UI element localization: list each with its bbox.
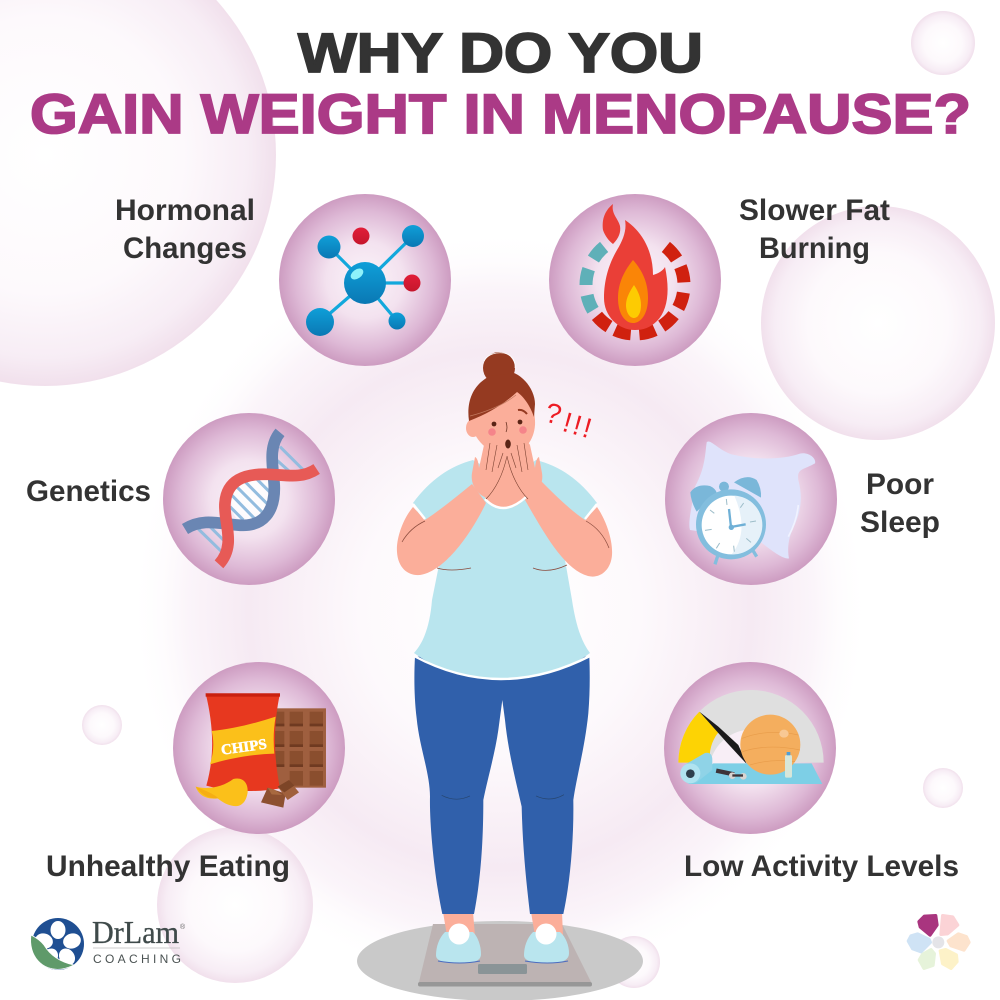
icon: six petal flower bbox=[908, 916, 969, 968]
arm creases bbox=[402, 521, 609, 570]
logo emblem bbox=[31, 918, 84, 970]
label: hormonal changes: Hormonal bbox=[115, 194, 255, 227]
right arm bbox=[525, 480, 612, 577]
surprise marks bbox=[542, 397, 598, 445]
t-shirt hem bbox=[414, 656, 590, 679]
label: slower fat burning: Burning bbox=[759, 232, 870, 265]
label: genetics: Genetics bbox=[26, 475, 151, 508]
logo wordmark: DrLam bbox=[92, 914, 179, 950]
sleeve trim bbox=[413, 504, 597, 519]
woman on scale bbox=[357, 352, 643, 1000]
label: unhealthy eating: Unhealthy Eating bbox=[46, 850, 290, 883]
label: poor sleep bbox=[860, 468, 940, 539]
title: GAIN WEIGHT IN MENOPAUSE? bbox=[30, 82, 971, 145]
label: hormonal changes bbox=[115, 194, 255, 265]
label: hormonal changes: Changes bbox=[123, 232, 247, 265]
floor shadow bbox=[357, 921, 643, 1000]
icon: low activity gauge and fitness gear bbox=[664, 662, 836, 834]
surprise marks: !!! bbox=[559, 406, 598, 445]
legs and shoes bbox=[436, 912, 569, 963]
label: poor sleep: Sleep bbox=[860, 506, 940, 539]
icon: molecule bbox=[279, 194, 451, 366]
icon: DNA helix bbox=[163, 413, 335, 585]
hands bbox=[472, 438, 542, 499]
icon: pillow and alarm clock bbox=[665, 413, 837, 585]
blue t-shirt bbox=[413, 460, 597, 679]
registered mark: ® bbox=[180, 923, 186, 931]
title bbox=[30, 21, 971, 145]
blue trousers bbox=[414, 657, 590, 914]
logo tagline: COACHING bbox=[93, 952, 181, 966]
icon: flame with burn ring bbox=[549, 194, 721, 366]
left arm bbox=[397, 484, 486, 575]
label: low activity levels: Low Activity Levels bbox=[684, 850, 959, 883]
neck and collar bbox=[485, 450, 526, 509]
logo: DrLam Coaching bbox=[31, 914, 186, 970]
head bbox=[466, 352, 535, 456]
label: poor sleep: Poor bbox=[866, 468, 934, 501]
icon: chips bag and chocolate: CHIPS bbox=[220, 736, 268, 759]
bathroom scale bbox=[418, 924, 592, 986]
surprise marks: ? bbox=[542, 397, 565, 431]
label: slower fat burning: Slower Fat bbox=[739, 194, 890, 227]
title: WHY DO YOU bbox=[298, 21, 703, 84]
label: slower fat burning bbox=[739, 194, 890, 265]
icon: chips bag and chocolate bbox=[173, 662, 345, 834]
